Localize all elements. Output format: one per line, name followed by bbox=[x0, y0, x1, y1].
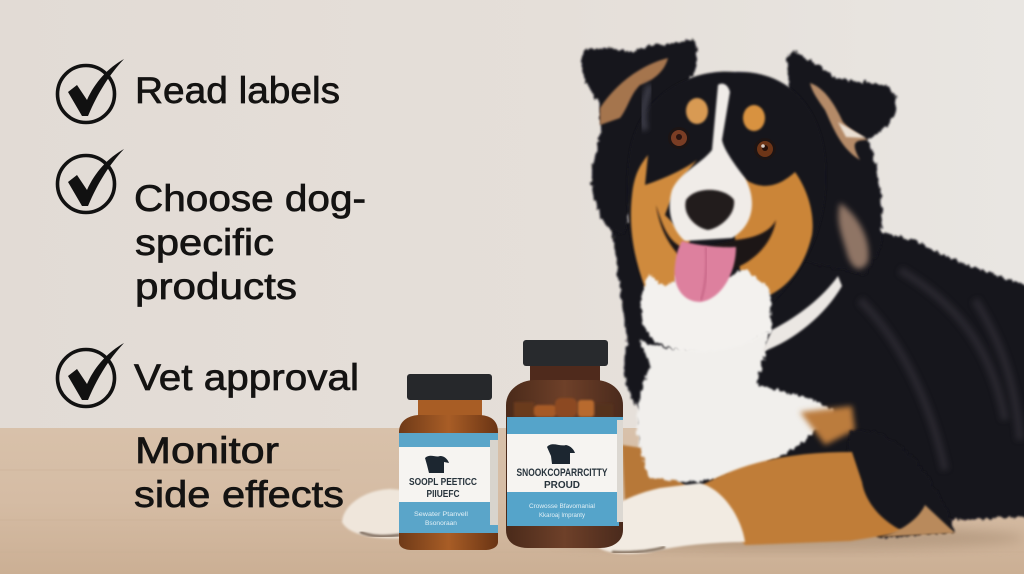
text: choose dog-specific products: Choose dog- bbox=[134, 178, 366, 219]
icon: check 2 bbox=[58, 149, 124, 212]
heading: read labels: Read labels bbox=[135, 70, 340, 111]
text: monitor side effects: side effects bbox=[134, 474, 344, 515]
label text: SOOPL PEETICC bbox=[409, 476, 477, 488]
tongue bbox=[674, 241, 736, 302]
text: monitor side effects bbox=[134, 430, 344, 515]
back paw left bbox=[342, 489, 402, 538]
icon: dog silhouette bbox=[425, 456, 449, 473]
face tan right bbox=[732, 172, 813, 295]
label text bbox=[516, 467, 608, 519]
text: monitor side effects: Monitor bbox=[135, 430, 279, 471]
tan eyebrows bbox=[686, 98, 708, 124]
label text: Sewater Ptanvell bbox=[414, 511, 469, 518]
small jar bbox=[399, 374, 498, 550]
icon: dog silhouette bbox=[547, 444, 575, 464]
dog bbox=[342, 37, 1024, 554]
white chest ruff bbox=[641, 268, 772, 352]
left ear bbox=[582, 37, 697, 235]
white collar stripe bbox=[762, 276, 842, 352]
checklist bbox=[58, 59, 366, 515]
label text bbox=[409, 476, 477, 527]
eyes bbox=[668, 127, 776, 160]
large jar bbox=[506, 340, 623, 548]
white blaze and muzzle bbox=[670, 84, 752, 241]
label text: Crowosse Bfavomanial bbox=[529, 503, 596, 510]
label text: SNOOKCOPARRCITTY bbox=[516, 467, 608, 479]
mouth bbox=[656, 205, 776, 268]
label text: Bsonoraan bbox=[425, 520, 457, 527]
text: vet approval: Vet approval bbox=[134, 357, 359, 398]
label text: PIIUEFC bbox=[426, 489, 460, 500]
text: choose dog-specific products bbox=[134, 178, 366, 307]
pills bbox=[514, 398, 613, 417]
floor shadow bbox=[555, 526, 1024, 550]
right ear bbox=[786, 50, 896, 275]
label text: PROUD bbox=[544, 480, 580, 491]
body bbox=[612, 200, 1024, 520]
icon: check 3 bbox=[58, 343, 124, 406]
front leg bbox=[840, 431, 955, 538]
text: choose dog-specific products: products bbox=[135, 266, 297, 307]
chest white bbox=[637, 330, 835, 482]
front paw bbox=[592, 483, 745, 554]
label text: Kkaroaj Impranty bbox=[539, 512, 586, 519]
wooden floor bbox=[0, 428, 1024, 574]
chest tan patch bbox=[800, 406, 855, 445]
background wall bbox=[0, 0, 1024, 430]
nose bbox=[685, 190, 734, 230]
face tan left bbox=[631, 155, 697, 292]
head bbox=[627, 72, 826, 330]
text: choose dog-specific products: specific bbox=[135, 222, 274, 263]
rear tan under chest bbox=[622, 445, 690, 502]
icon: check 1 bbox=[58, 59, 124, 122]
